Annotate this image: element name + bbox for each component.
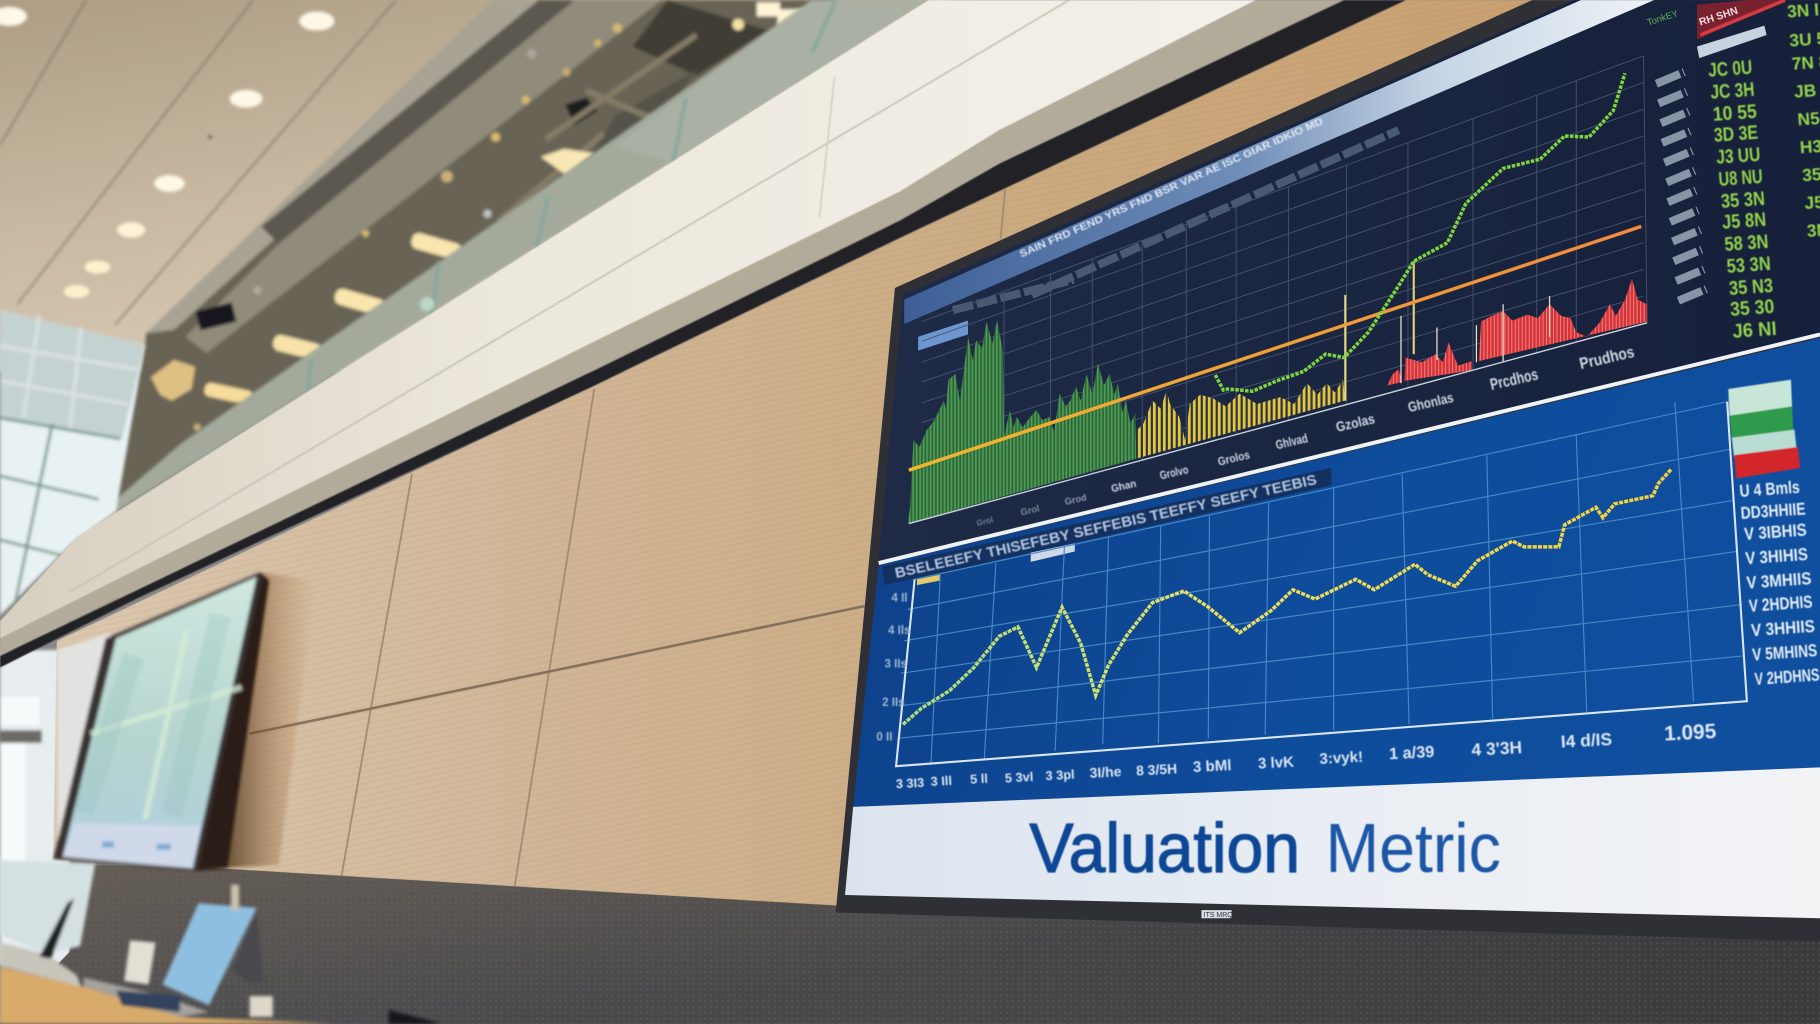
bezel logo: ITS MRQ <box>1204 912 1233 919</box>
upper chart axis labels: Grod <box>1064 492 1088 507</box>
legend text rows: V 3HIHIS <box>1745 544 1809 568</box>
lower chart x axis labels: I4 d/IS <box>1560 729 1613 752</box>
legend text rows: DD3HHIIE <box>1740 498 1806 523</box>
lower blue panel <box>853 338 1820 807</box>
pale microphone <box>231 885 239 910</box>
upper chart axis labels: Ghlvad <box>1274 430 1309 452</box>
lower chart x axis labels: 8 3/5H <box>1136 760 1177 778</box>
lower chart x axis labels: 4 3'3H <box>1471 737 1523 760</box>
top right ticker alerts: RH SHN <box>1698 6 1739 29</box>
yellow price line <box>903 469 1671 724</box>
title: Valuation Metric <box>1030 809 1501 887</box>
divider line between charts <box>879 334 1820 563</box>
white cup <box>250 996 273 1017</box>
small left wall screen <box>53 572 316 871</box>
ceiling with recessed lights <box>0 0 952 372</box>
green ticker columns: J3 UU <box>1716 144 1761 169</box>
legend text rows <box>1739 477 1820 689</box>
lower chart x axis labels: 3 3I3 <box>895 775 925 791</box>
red volume bars <box>1387 369 1402 385</box>
white caption strip <box>845 767 1820 918</box>
upper chart baseline <box>909 323 1647 524</box>
upper chart axis labels: Grol <box>1020 503 1040 517</box>
lower chart axes <box>896 402 1747 766</box>
left windows <box>0 310 145 964</box>
green ticker columns: 58 3N <box>1724 231 1769 256</box>
lower panel tag <box>1031 543 1075 562</box>
lower chart y axis labels: 4 Il <box>891 591 908 604</box>
lower chart x axis labels <box>895 720 1717 791</box>
lower chart x axis labels: 3 Ill <box>930 773 952 789</box>
green price line <box>1215 73 1625 391</box>
dark top panel <box>879 0 1820 561</box>
small yellow tag <box>917 575 940 585</box>
green ticker columns: JC 3H <box>1710 79 1755 104</box>
black chair top <box>389 1010 441 1024</box>
lower chart x axis labels: 5 3vl <box>1005 769 1034 785</box>
upper chart axis labels: Prudhos <box>1578 343 1636 373</box>
upper chart axis labels: Gzolas <box>1334 410 1376 435</box>
lower chart x axis labels: 5 ll <box>970 771 988 787</box>
lower chart y axis labels: 2 IIs <box>882 696 905 709</box>
atrium upper floor and light fixtures <box>116 0 836 517</box>
upper chart axis labels: Grol <box>976 515 994 528</box>
legend text rows: V 3IBHIS <box>1743 520 1807 544</box>
green ticker columns: U8 NU <box>1718 166 1763 191</box>
dark shadow gap under fascia <box>0 0 1406 668</box>
header tab row <box>953 130 1399 310</box>
title: Valuation Metric: Metric <box>1326 809 1501 887</box>
lower chart y axis labels: 4 Ils <box>888 624 911 637</box>
lower chart x axis labels: 3 lvK <box>1258 754 1295 773</box>
lower chart y axis labels: 3 IIs <box>884 658 907 671</box>
chart spikes <box>1345 261 1414 401</box>
orange trend line <box>909 226 1641 470</box>
white fascia band <box>0 0 1344 656</box>
tablet stand <box>232 911 263 984</box>
upper chart axis labels: Prcdhos <box>1488 366 1540 394</box>
green ticker columns: 3N I <box>1786 0 1820 22</box>
green ticker columns: 35 30 <box>1729 296 1775 321</box>
yellow volume bars <box>1136 380 1345 459</box>
green ticker columns: 35 3N <box>1720 188 1766 213</box>
upper chart axis labels: Grolvo <box>1158 463 1190 482</box>
main wall screen <box>836 0 1820 941</box>
green ticker columns: 3D 3E <box>1713 122 1759 147</box>
header stripe text: SAIN FRD FEND YRS FND BSR VAR AE ISC GIAR IDKIO MD <box>1018 116 1326 261</box>
screen bezel <box>836 0 1820 941</box>
legend text rows: U 4 Bmls <box>1739 477 1800 501</box>
status colour legend <box>1728 380 1800 478</box>
lower chart x axis labels: 3 bMl <box>1193 757 1232 776</box>
lower panel header tab <box>882 468 1331 585</box>
lower chart grid <box>897 402 1743 765</box>
legend text rows: V 3MHIIS <box>1746 568 1812 593</box>
lower chart y axis labels <box>876 591 911 744</box>
dark keyboard <box>116 990 180 1012</box>
green ticker columns: JC 0U <box>1707 57 1753 82</box>
header stripe <box>904 0 1654 324</box>
glass railing <box>78 0 929 536</box>
charcoal lower wall <box>0 865 1820 1024</box>
tab label <box>918 320 968 351</box>
upper chart axis labels: Ghonlas <box>1406 389 1455 415</box>
lower chart x axis labels: 3:vyk! <box>1319 749 1363 768</box>
title: Valuation Metric: Valuation <box>1030 809 1300 887</box>
tablet monitor <box>162 903 257 1005</box>
green ticker columns <box>1707 0 1820 343</box>
lower chart x axis labels: 1.095 <box>1664 720 1717 746</box>
green volume bars <box>908 320 1136 524</box>
green ticker columns: 35 N3 <box>1728 275 1774 300</box>
upper chart axis labels: Grolos <box>1217 449 1251 468</box>
lower chart x axis labels: 3I/he <box>1089 763 1122 781</box>
lower chart y axis labels: 0 II <box>876 731 892 744</box>
light panel behind desk <box>0 860 95 954</box>
lower chart x axis labels: 3 3pl <box>1045 767 1075 783</box>
desk clutter <box>0 943 81 987</box>
front desk with monitors <box>0 860 441 1024</box>
white fascia band: TRADING FLOOR <box>67 596 122 629</box>
lower chart x axis labels: 1 a/39 <box>1389 743 1435 763</box>
lower panel header text: BSELEEEFY THISEFEBY SEFFEBIS TEEFFY SEEFY TEEBIS <box>893 471 1318 582</box>
green ticker columns: J5 8N <box>1721 209 1767 234</box>
white box <box>124 940 156 984</box>
wood panel wall <box>53 0 1561 908</box>
green ticker columns: 10 55 <box>1712 101 1758 126</box>
side list markers <box>1656 72 1706 301</box>
upper chart axis labels <box>976 343 1636 528</box>
green ticker columns: 53 3N <box>1726 253 1771 278</box>
small black monitor <box>39 899 74 959</box>
top right ticker alerts: TonkEY <box>1646 8 1679 28</box>
wood counter <box>0 967 337 1024</box>
upper chart axis labels: Ghan <box>1110 479 1138 495</box>
green ticker columns: J6 NI <box>1732 318 1777 343</box>
top right ticker alerts <box>1646 0 1785 58</box>
upper chart grid <box>922 56 1647 504</box>
